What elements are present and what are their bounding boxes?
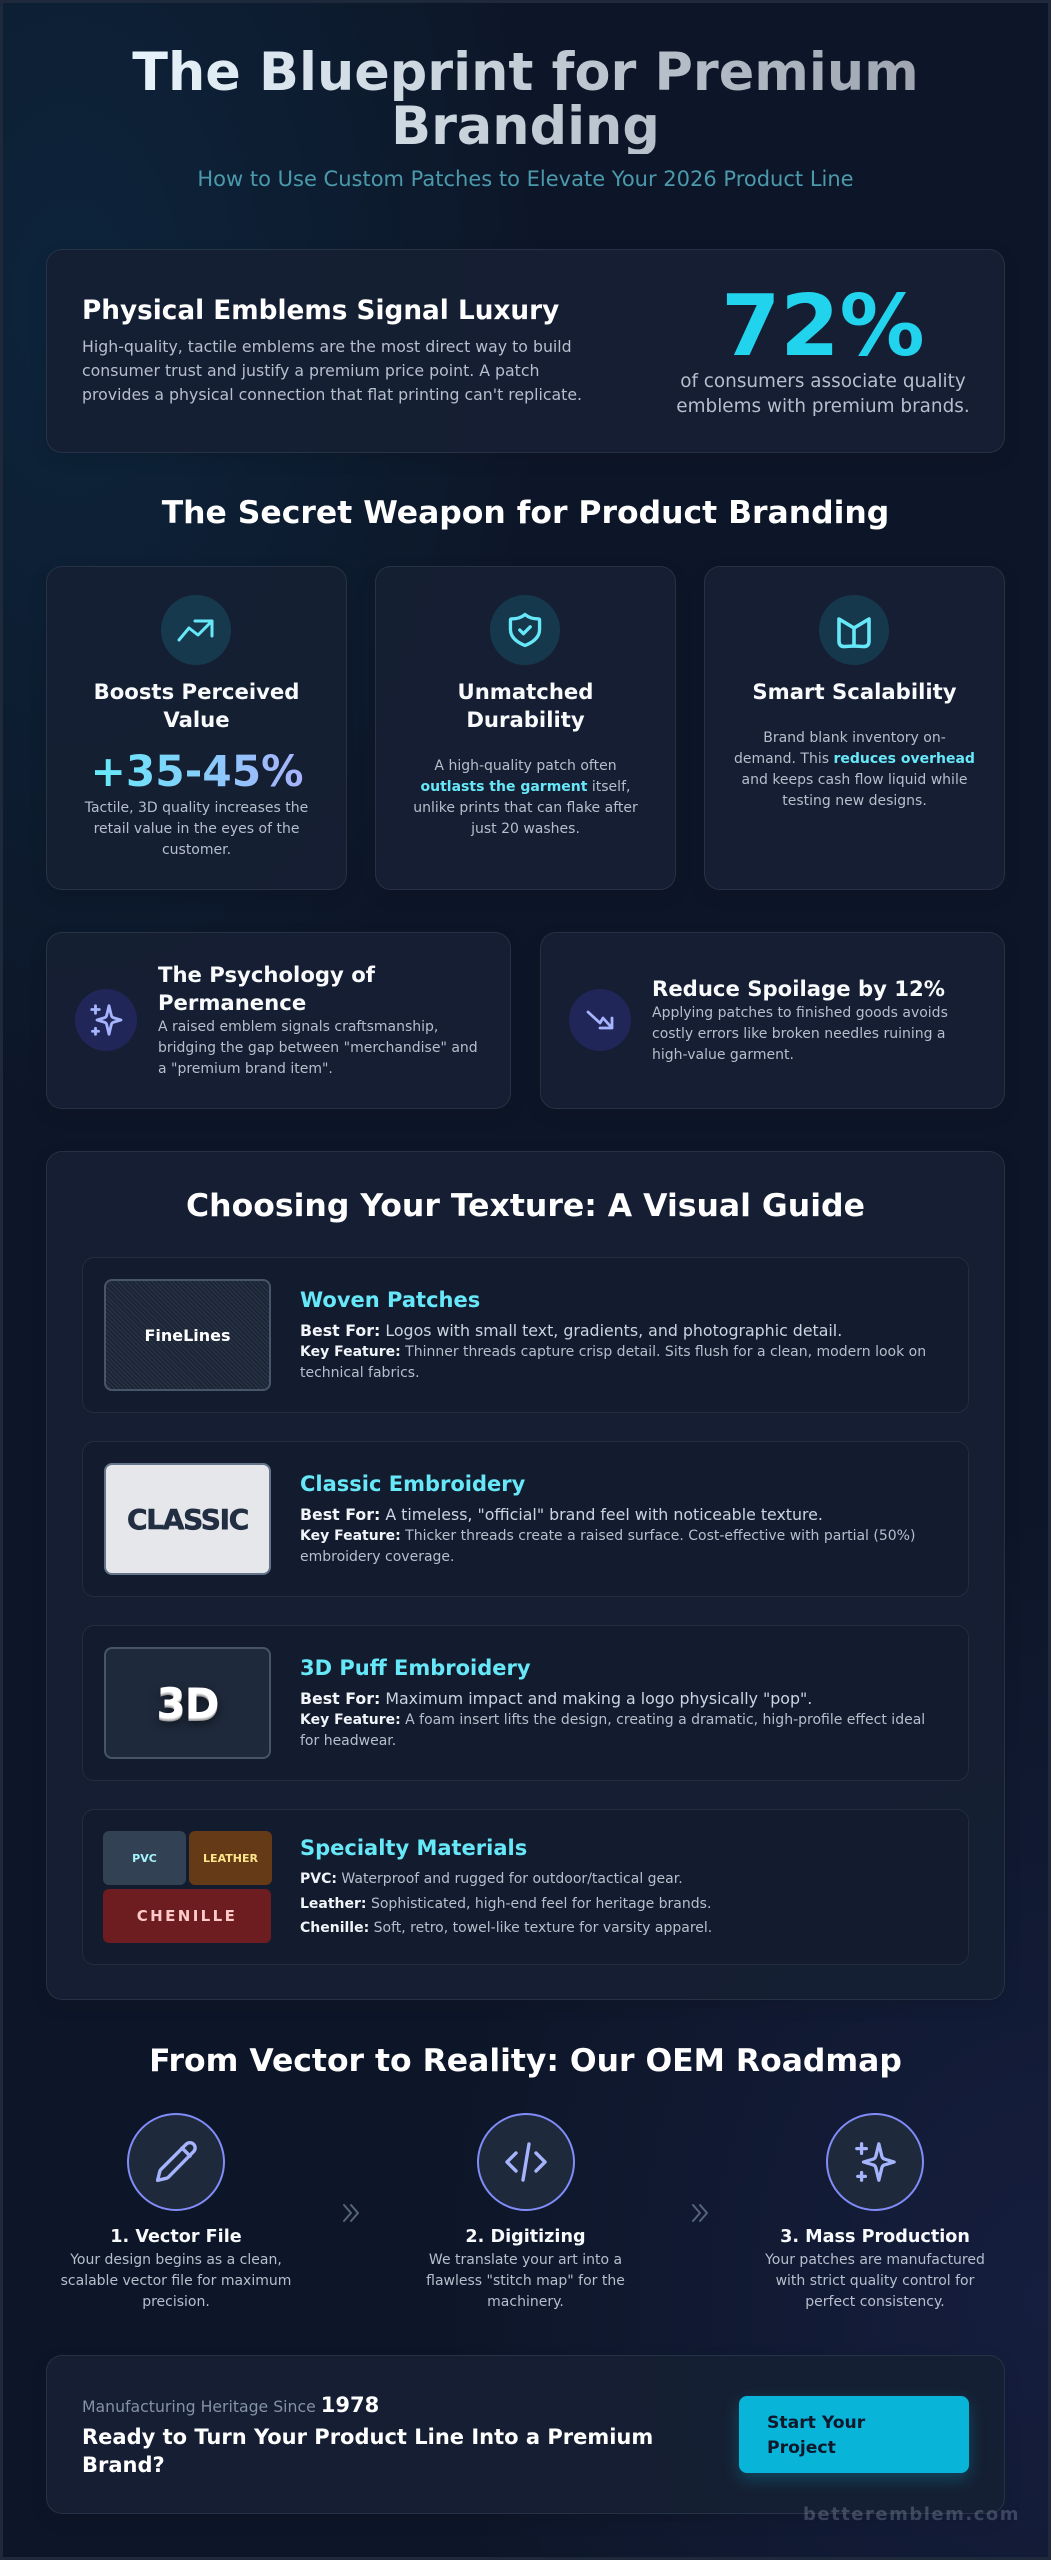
card text: [158, 1019, 478, 1077]
key feature: for headwear.: [300, 1733, 396, 1749]
subtitle: How to Use Custom Patches to Elevate Your 2026 Product Line: [197, 167, 854, 191]
icon: code: [476, 2113, 574, 2211]
heading: roadmap: From Vector to Reality: Our OEM Roadmap: [149, 2043, 902, 2079]
icon: pencil: [127, 2113, 225, 2211]
step text: precision.: [142, 2294, 210, 2310]
title: Branding: [391, 96, 660, 157]
card text: [734, 730, 975, 809]
cta button: [738, 2396, 969, 2473]
step text: We translate your art into a: [429, 2252, 622, 2268]
key feature: [300, 1712, 925, 1749]
card text: demand. This reduces overhead: [734, 751, 975, 767]
step title: 1. Vector File: [110, 2227, 242, 2247]
key feature: Key Feature: Thinner threads capture crisp detail. Sits flush for a clean, modern look on: [300, 1344, 926, 1360]
material list: PVC: Waterproof and rugged for outdoor/tactical gear.: [300, 1871, 683, 1887]
material list: [300, 1871, 712, 1936]
watermark: betteremblem.com: [803, 2504, 1020, 2525]
row: classic embroidery: [82, 1441, 969, 1597]
button label: Start Your: [767, 2412, 865, 2432]
row title: 3D Puff Embroidery: [300, 1656, 531, 1680]
button label: Project: [767, 2438, 836, 2458]
card title: [94, 679, 299, 732]
card text: A high-quality patch often: [434, 758, 617, 774]
card title: [458, 679, 593, 732]
step text: scalable vector file for maximum: [61, 2273, 291, 2289]
cta headline: Brand?: [82, 2453, 165, 2477]
icon: open book: [819, 595, 889, 665]
icon: sparkles: [75, 989, 137, 1051]
card: unmatched durability: [375, 566, 676, 890]
icon: trending up: [161, 595, 231, 665]
step text: [765, 2252, 985, 2310]
step text: with strict quality control for: [776, 2273, 974, 2289]
swatch: classic: CLASSIC: [127, 1502, 248, 1536]
step title: 3. Mass Production: [780, 2227, 970, 2247]
swatch: fine lines: FineLines: [144, 1326, 231, 1344]
tile: pvc: [103, 1831, 186, 1885]
tile: leather: LEATHER: [203, 1852, 258, 1864]
statistic caption: emblems with premium brands.: [676, 396, 970, 417]
title: [0, 46, 1051, 154]
key feature: [300, 1344, 926, 1381]
step 2: digitizing: [426, 2113, 625, 2310]
hero text: High-quality, tactile emblems are the most direct way to build: [82, 337, 572, 356]
card text: A raised emblem signals craftsmanship,: [158, 1019, 438, 1035]
card text: [413, 758, 638, 837]
step text: flawless "stitch map" for the: [426, 2273, 625, 2289]
stat: +35-45%: +35-45%: [90, 747, 304, 796]
step text: Your design begins as a clean,: [70, 2252, 282, 2268]
card text: high-value garment.: [652, 1047, 794, 1063]
row: specialty materials: [82, 1809, 969, 1965]
heritage line: Manufacturing Heritage Since 1978: [82, 2393, 379, 2417]
icon: shield check: [490, 595, 560, 665]
card title: Durability: [466, 707, 585, 732]
swatch: 3d: 3D: [156, 1678, 219, 1728]
button label: [767, 2412, 866, 2458]
step text: [426, 2252, 625, 2310]
card text: [652, 1005, 948, 1063]
statistic caption: of consumers associate quality: [680, 371, 966, 392]
card: boosts perceived value: [46, 566, 347, 890]
best for: Best For: Logos with small text, gradients, and photographic detail.: [300, 1321, 842, 1340]
card title: Unmatched: [458, 679, 593, 704]
card title: [158, 962, 376, 1015]
card text: testing new designs.: [782, 793, 927, 809]
heading: secret weapon: The Secret Weapon for Product Branding: [162, 495, 889, 531]
card text: retail value in the eyes of the: [94, 821, 299, 837]
row title: Classic Embroidery: [300, 1472, 525, 1496]
statistic caption: [676, 371, 970, 417]
card title: Boosts Perceived: [94, 679, 299, 704]
swatch: fine lines: [104, 1279, 271, 1391]
card title: Reduce Spoilage by 12%: [652, 976, 945, 1001]
card text: outlasts the garment itself,: [421, 779, 630, 795]
best for: Best For: Maximum impact and making a logo physically "pop".: [300, 1689, 812, 1708]
card text: Tactile, 3D quality increases the: [85, 800, 308, 816]
hero text: provides a physical connection that flat printing can't replicate.: [82, 385, 582, 404]
card: smart scalability: [704, 566, 1005, 890]
step text: Your patches are manufactured: [765, 2252, 985, 2268]
swatch: 3d: [104, 1647, 271, 1759]
step 3: mass production: [765, 2113, 985, 2310]
tile: leather: [189, 1831, 272, 1885]
card text: just 20 washes.: [471, 821, 580, 837]
card text: and keeps cash flow liquid while: [742, 772, 967, 788]
row: woven patches: [82, 1257, 969, 1413]
card text: Brand blank inventory on-: [763, 730, 946, 746]
card text: bridging the gap between "merchandise" and: [158, 1040, 478, 1056]
step text: [61, 2252, 291, 2310]
arrow: step 1 to 2: [343, 2204, 359, 2222]
key feature: technical fabrics.: [300, 1365, 420, 1381]
tile: chenille: CHENILLE: [137, 1907, 237, 1925]
step text: perfect consistency.: [805, 2294, 945, 2310]
panel heading: Choosing Your Texture: A Visual Guide: [186, 1188, 865, 1224]
card text: customer.: [162, 842, 231, 858]
hero text: consumer trust and justify a premium price point. A patch: [82, 361, 540, 380]
key feature: Key Feature: Thicker threads create a raised surface. Cost-effective with partial (50%): [300, 1528, 915, 1544]
card title: Smart Scalability: [752, 679, 957, 704]
tile: pvc: PVC: [132, 1852, 157, 1864]
card: reduce spoilage: [540, 932, 1005, 1109]
panel: physical emblems signal luxury: [46, 249, 1005, 453]
arrow: step 2 to 3: [692, 2204, 708, 2222]
card text: a "premium brand item".: [158, 1061, 333, 1077]
step title: 2. Digitizing: [465, 2227, 586, 2247]
material list: Leather: Sophisticated, high-end feel for heritage brands.: [300, 1896, 711, 1912]
best for: Best For: A timeless, "official" brand feel with noticeable texture.: [300, 1505, 823, 1524]
card title: The Psychology of: [158, 962, 375, 987]
title: The Blueprint for Premium: [132, 42, 919, 103]
card: psychology of permanence: [46, 932, 511, 1109]
swatch: classic: [104, 1463, 271, 1575]
row: 3d puff embroidery: [82, 1625, 969, 1781]
card text: costly errors like broken needles ruining a: [652, 1026, 946, 1042]
cta headline: Ready to Turn Your Product Line Into a Premium: [82, 2425, 653, 2449]
card title: Value: [163, 707, 230, 732]
key feature: Key Feature: A foam insert lifts the design, creating a dramatic, high-profile effect ideal: [300, 1712, 925, 1728]
card text: unlike prints that can flake after: [413, 800, 638, 816]
72% statistic: 72%: [721, 277, 925, 376]
hero heading: Physical Emblems Signal Luxury: [82, 296, 559, 326]
key feature: [300, 1528, 915, 1565]
panel: call to action: [46, 2355, 1005, 2514]
card text: Applying patches to finished goods avoids: [652, 1005, 948, 1021]
icon: trending down: [569, 989, 631, 1051]
row title: Woven Patches: [300, 1288, 480, 1312]
cta headline: [82, 2425, 653, 2477]
step text: machinery.: [487, 2294, 564, 2310]
icon: sparkles: [826, 2113, 924, 2211]
panel: choosing your texture: [46, 1151, 1005, 2000]
key feature: embroidery coverage.: [300, 1549, 454, 1565]
card title: Permanence: [158, 990, 306, 1015]
material list: Chenille: Soft, retro, towel-like texture for varsity apparel.: [300, 1920, 712, 1936]
hero text: [82, 337, 582, 404]
tile: chenille: [103, 1889, 271, 1943]
step 1: vector file: [61, 2113, 291, 2310]
card text: [84, 800, 308, 858]
row title: Specialty Materials: [300, 1836, 527, 1860]
